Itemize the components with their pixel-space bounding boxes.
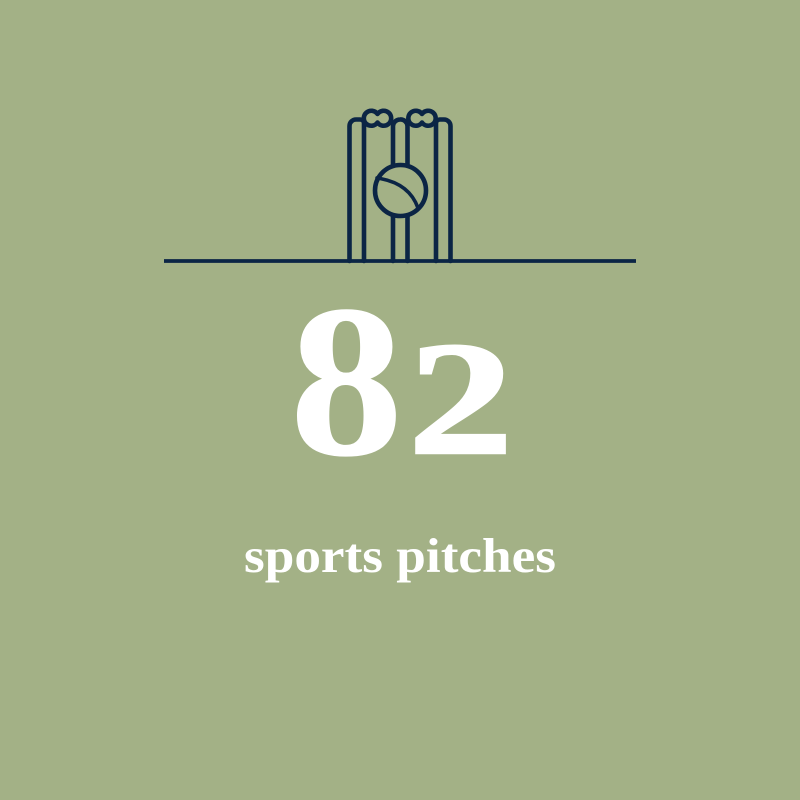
digit 8: 8 [290, 261, 403, 501]
ball seam [377, 178, 418, 208]
digit 2: 2 [408, 309, 513, 488]
statistic number [290, 261, 513, 501]
left stump [350, 120, 364, 261]
icon: cricket wicket and ball [164, 111, 636, 261]
right bail [408, 111, 436, 126]
centre stump [393, 119, 408, 261]
left bail [364, 111, 391, 126]
right stump [436, 120, 450, 261]
caption: sports pitches [244, 528, 556, 583]
cricket ball [375, 165, 426, 216]
ground line [164, 259, 636, 263]
